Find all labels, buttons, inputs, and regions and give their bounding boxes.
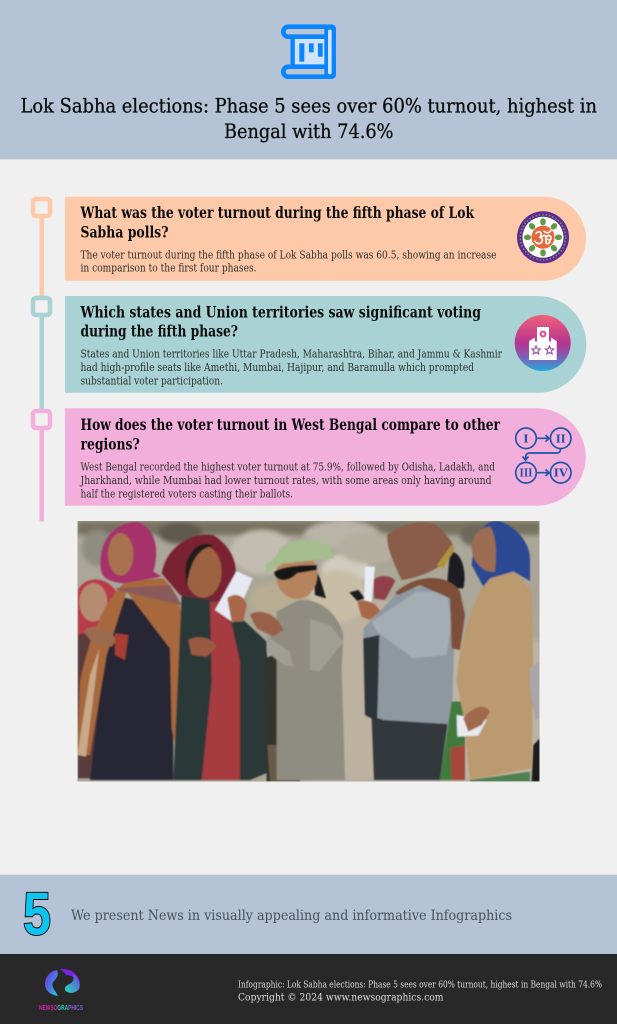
heading: regions? [80,434,140,453]
body text: The voter turnout during the fifth phase of Lok Sabha polls was 60.5, showing an increase [80,248,496,261]
figure: woman in blue scarf [440,521,540,782]
panel: voter turnout [65,197,586,281]
logo numeral 5: 5 [23,880,51,948]
figure: woman in pink hood [78,522,182,781]
timeline [33,199,50,522]
body text: half the registered voters casting their ballots. [80,488,293,500]
footer [0,954,617,1024]
figure: woman in grey jacket [349,523,465,780]
icon: sequence of phases [516,428,571,483]
body text [80,461,495,500]
figure: back woman [78,580,117,778]
heading: What was the voter turnout during the fifth phase of Lok [80,203,475,222]
body text [80,348,503,387]
title: Bengal with 74.6% [224,120,394,143]
body text: West Bengal recorded the highest voter turnout at 75.9%, followed by Odisha, Ladakh, and [80,461,495,474]
icon: sequence of phases: I [523,432,529,446]
tagline band [0,875,617,954]
body text: had high-profile seats like Amethi, Mumbai, Hajipur, and Baramulla which prompted [80,361,474,374]
icon: sequence of phases: IV [554,467,568,480]
heading [80,203,475,242]
body text: in comparison to the first four phases. [80,262,256,275]
header band [0,0,617,159]
body text: States and Union territories like Uttar Pradesh, Maharashtra, Bihar, and Jammu & Kashmir [80,348,503,361]
title [20,95,597,143]
heading: during the fifth phase? [80,322,238,341]
icon: sequence of phases: III [520,467,532,480]
heading [80,302,481,341]
heading: Sabha polls? [80,223,168,242]
heading [80,415,501,453]
figure: woman in green cap [265,648,300,782]
heading: Which states and Union territories saw significant voting [80,302,481,321]
body text: Jharkhand, while Mumbai had lower turnout rates, with some areas only having around [80,474,492,487]
panel: states and territories [65,296,586,393]
footer credit text: Copyright © 2024 www.newsographics.com [238,992,444,1004]
logo: Newsographics: NEWSOGRAPHICS [39,1003,83,1012]
body text [80,248,496,275]
icon: om emblem [517,211,569,263]
panel: West Bengal comparison [65,408,586,506]
logo: Newsographics [39,969,83,1012]
icon: sequence of phases: II [556,433,566,446]
footer credit text [238,980,602,1004]
photo: women voters in Ladakh [77,521,542,782]
icon: ballot box [515,315,571,371]
icon: scroll [283,24,336,79]
heading: How does the voter turnout in West Bengal compare to other [80,415,501,434]
figure: woman in red scarf [162,534,270,780]
body text: substantial voter participation. [80,374,223,387]
tagline text: We present News in visually appealing and informative Infographics [71,908,512,924]
